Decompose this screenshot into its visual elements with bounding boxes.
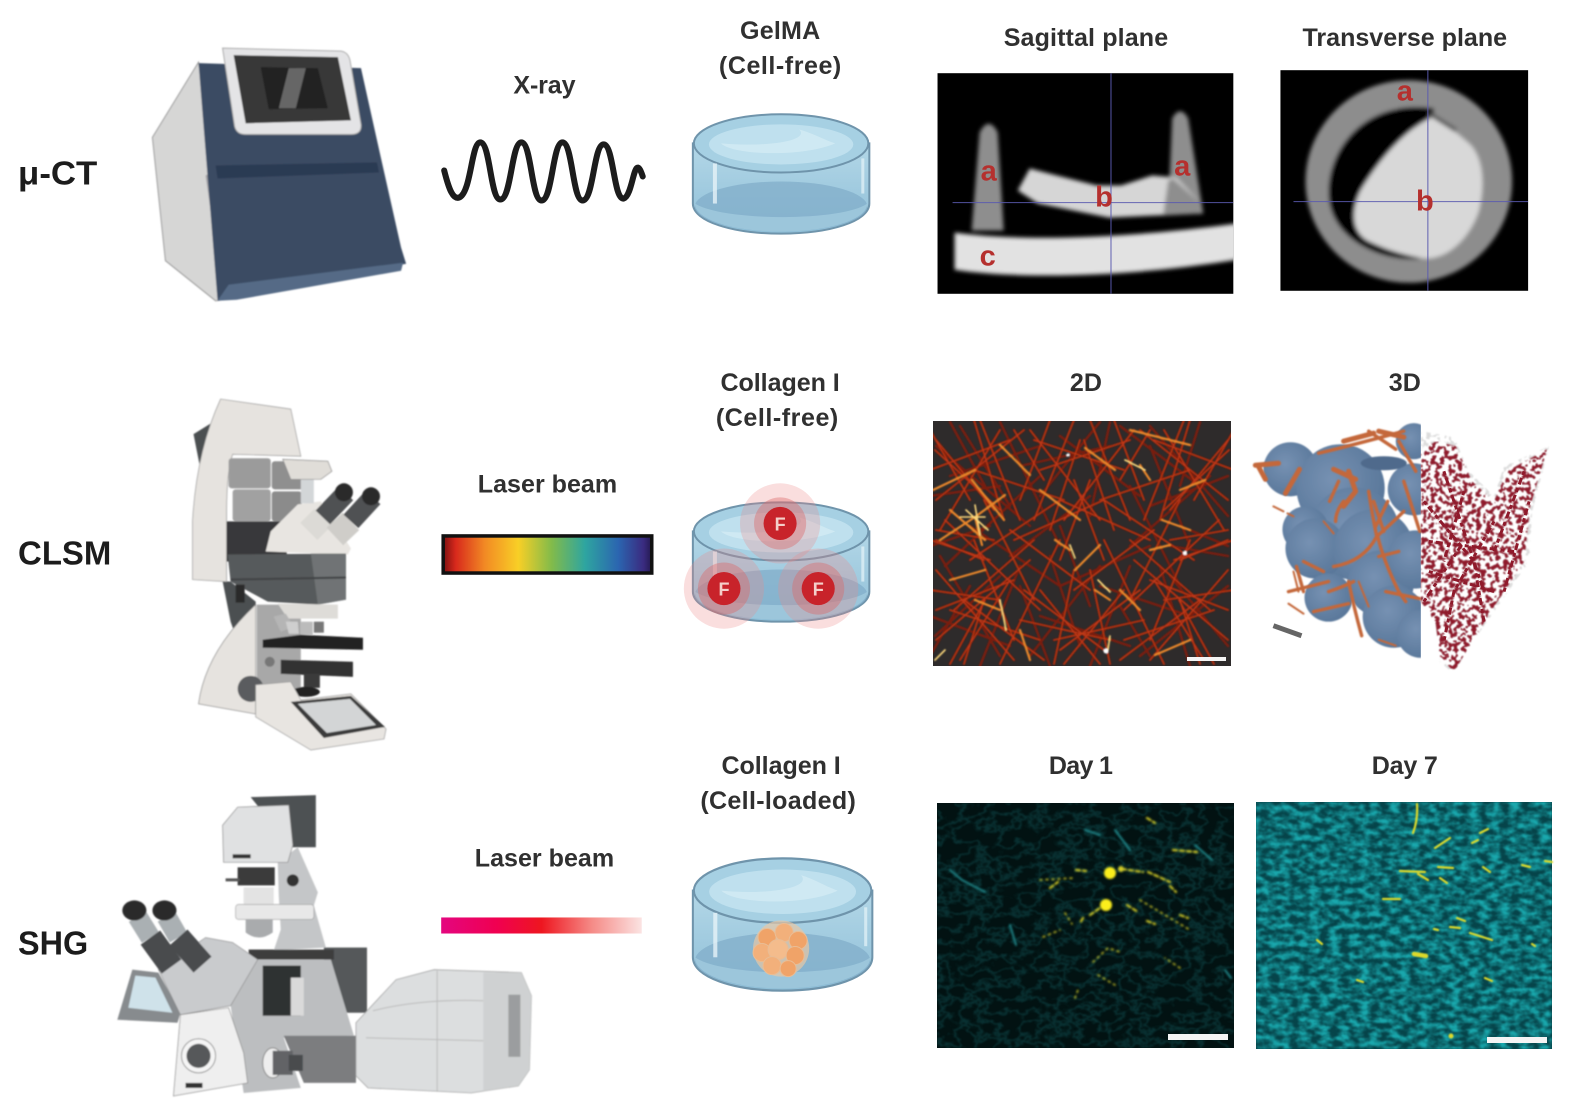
cell cluster — [753, 920, 809, 977]
scale bar — [1487, 1037, 1547, 1043]
fluorophore top — [740, 483, 820, 564]
blue pores — [1262, 422, 1421, 659]
heading: Collagen I (Cell-free): Collagen I — [720, 369, 840, 397]
heading: 3D: 3D — [1389, 369, 1421, 397]
icon: cell-loaded collagen dish — [693, 858, 872, 991]
heading: Transverse plane: Transverse plane — [1303, 24, 1507, 52]
icon: micro-CT scanner — [152, 48, 406, 301]
icon: confocal microscope — [193, 399, 386, 750]
row label: SHG: SHG — [18, 926, 88, 963]
labels a, b, c: c — [980, 241, 996, 273]
labels a, b: b — [1416, 186, 1434, 218]
heading: Collagen I (Cell-free) — [716, 369, 840, 432]
fluorophore left — [684, 548, 764, 629]
yellow signal — [1317, 804, 1552, 1038]
heading: GelMA (Cell-free) — [719, 17, 841, 80]
orange fibres — [1255, 431, 1420, 646]
row label: μ-CT: μ-CT — [18, 155, 97, 192]
label: X-ray: X-ray — [513, 71, 576, 99]
heading: Collagen I (Cell-loaded): Collagen I — [721, 752, 841, 780]
labels a, b, c: a — [1174, 150, 1191, 182]
heading: Day 7: Day 7 — [1372, 752, 1438, 780]
yellow signal — [1040, 818, 1197, 998]
heading: Collagen I (Cell-free): (Cell-free) — [716, 404, 838, 432]
labels a, b: a — [1397, 75, 1414, 107]
scale bar — [1273, 626, 1302, 636]
fluorophore right — [778, 548, 858, 629]
labels a, b, c: b — [1095, 182, 1113, 214]
row label: CLSM: CLSM — [18, 536, 111, 573]
icon: wave X-ray — [444, 71, 643, 201]
scale bar — [1168, 1034, 1228, 1040]
heading: GelMA (Cell-free): GelMA — [740, 17, 820, 45]
scale bar — [1187, 657, 1226, 661]
labels a, b — [1397, 75, 1434, 218]
fluorophore left: F — [718, 580, 729, 600]
label: laser beam (SHG): Laser beam — [475, 844, 614, 872]
labels a, b, c — [980, 150, 1191, 273]
spectrum bar — [443, 536, 652, 573]
image: 3D reconstruction — [1255, 423, 1549, 674]
red speckled fibres — [1421, 431, 1549, 674]
labels a, b, c: a — [981, 155, 998, 187]
label: laser beam (CLSM): Laser beam — [478, 470, 617, 498]
image: 2D collagen fibres — [930, 420, 1234, 666]
heading: Collagen I (Cell-loaded): (Cell-loaded) — [700, 787, 856, 815]
fluorophore top: F — [775, 514, 786, 534]
heading: Day 1: Day 1 — [1049, 752, 1113, 780]
heading: GelMA (Cell-free): (Cell-free) — [719, 52, 841, 80]
icon: fluorescent-labelled collagen dish — [684, 483, 869, 629]
heading: 2D: 2D — [1070, 369, 1102, 397]
teal highlights — [950, 830, 1231, 978]
icon: GelMA hydrogel dish — [693, 114, 869, 234]
icon: inverted SHG microscope with laser box — [117, 795, 531, 1096]
image: SHG Day 1 — [937, 803, 1234, 1048]
image: SHG Day 7 — [1256, 802, 1552, 1049]
image: sagittal plane scan — [938, 73, 1243, 294]
heading: Sagittal plane: Sagittal plane — [1004, 24, 1168, 52]
SHG beam gradient — [441, 917, 642, 934]
fluorophore right: F — [813, 580, 824, 600]
image: transverse plane scan — [1280, 70, 1528, 291]
heading: Collagen I (Cell-loaded) — [700, 752, 856, 815]
